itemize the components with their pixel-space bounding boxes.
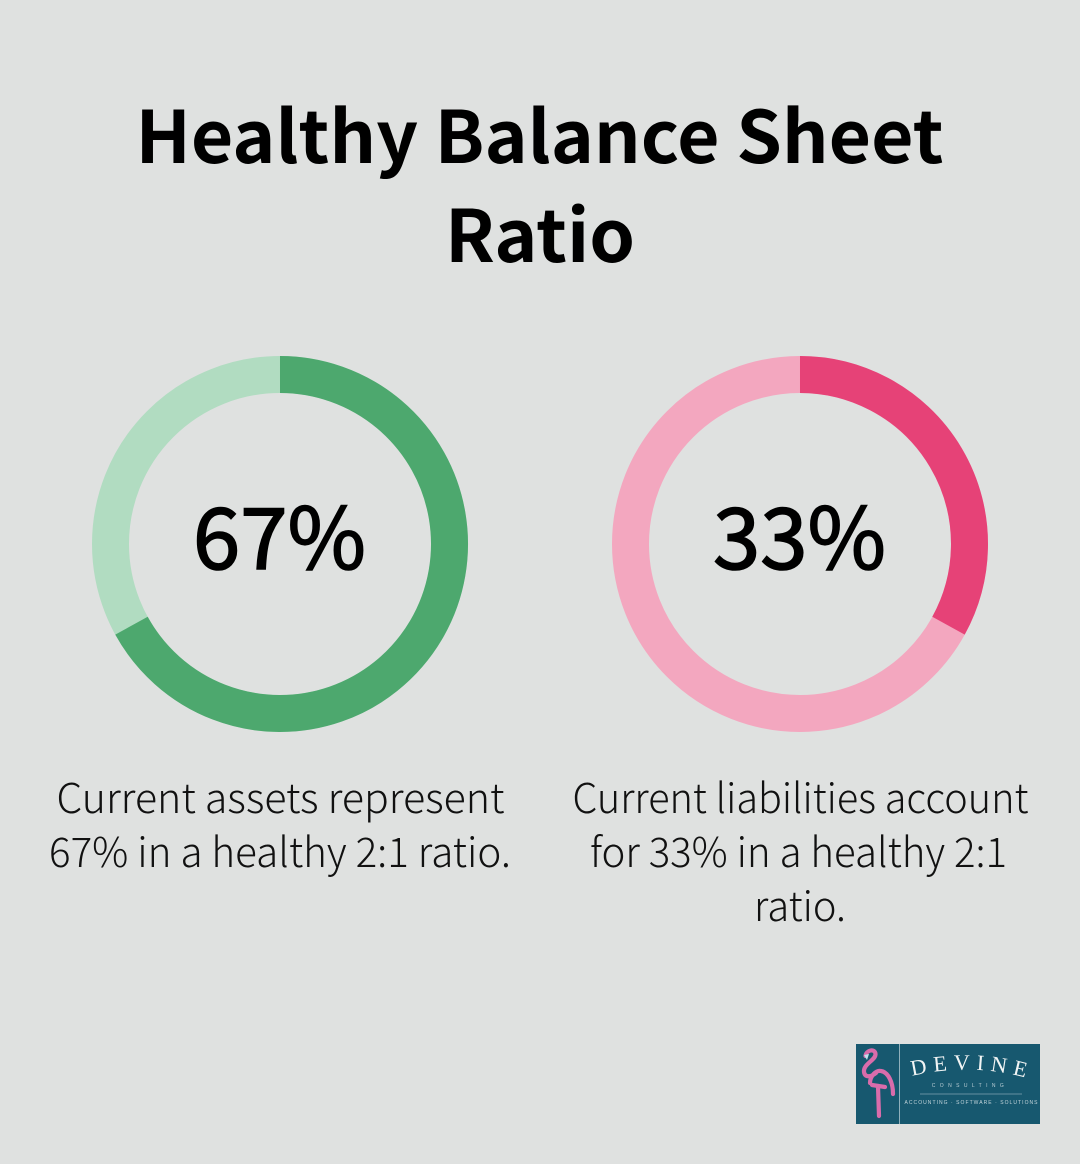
icon: flamingo: [864, 1050, 893, 1116]
description: assets: [49, 765, 511, 879]
panel: current liabilities: [572, 374, 1028, 933]
tagline: services: ACCOUNTING · SOFTWARE · SOLUTIONS: [904, 1100, 1038, 1106]
description: liabilities: Current liabilities account: [572, 765, 1028, 825]
description: assets: 67% in a healthy 2:1 ratio.: [49, 819, 511, 879]
donut chart: assets 67%: [110, 374, 450, 714]
title: [136, 79, 944, 283]
wordmark: [910, 1055, 1027, 1078]
title: Healthy Balance Sheet: [136, 79, 944, 184]
description: liabilities: for 33% in a healthy 2:1: [590, 819, 1007, 879]
value: 67%: 67%: [193, 471, 366, 594]
wordmark: DEVINE: [910, 1055, 1027, 1078]
description: assets: Current assets represent: [56, 765, 505, 825]
description: liabilities: ratio.: [754, 873, 846, 933]
logo: Devine Consulting: [856, 1044, 1040, 1124]
donut chart: liabilities 33%: [630, 374, 970, 714]
tagline: consulting: CONSULTING: [932, 1083, 1008, 1089]
value: 33%: 33%: [713, 471, 886, 594]
description: liabilities: [572, 765, 1028, 933]
panel: current assets: [49, 374, 511, 879]
icon: flamingo head: [864, 1054, 869, 1060]
title: Ratio: [445, 178, 635, 283]
